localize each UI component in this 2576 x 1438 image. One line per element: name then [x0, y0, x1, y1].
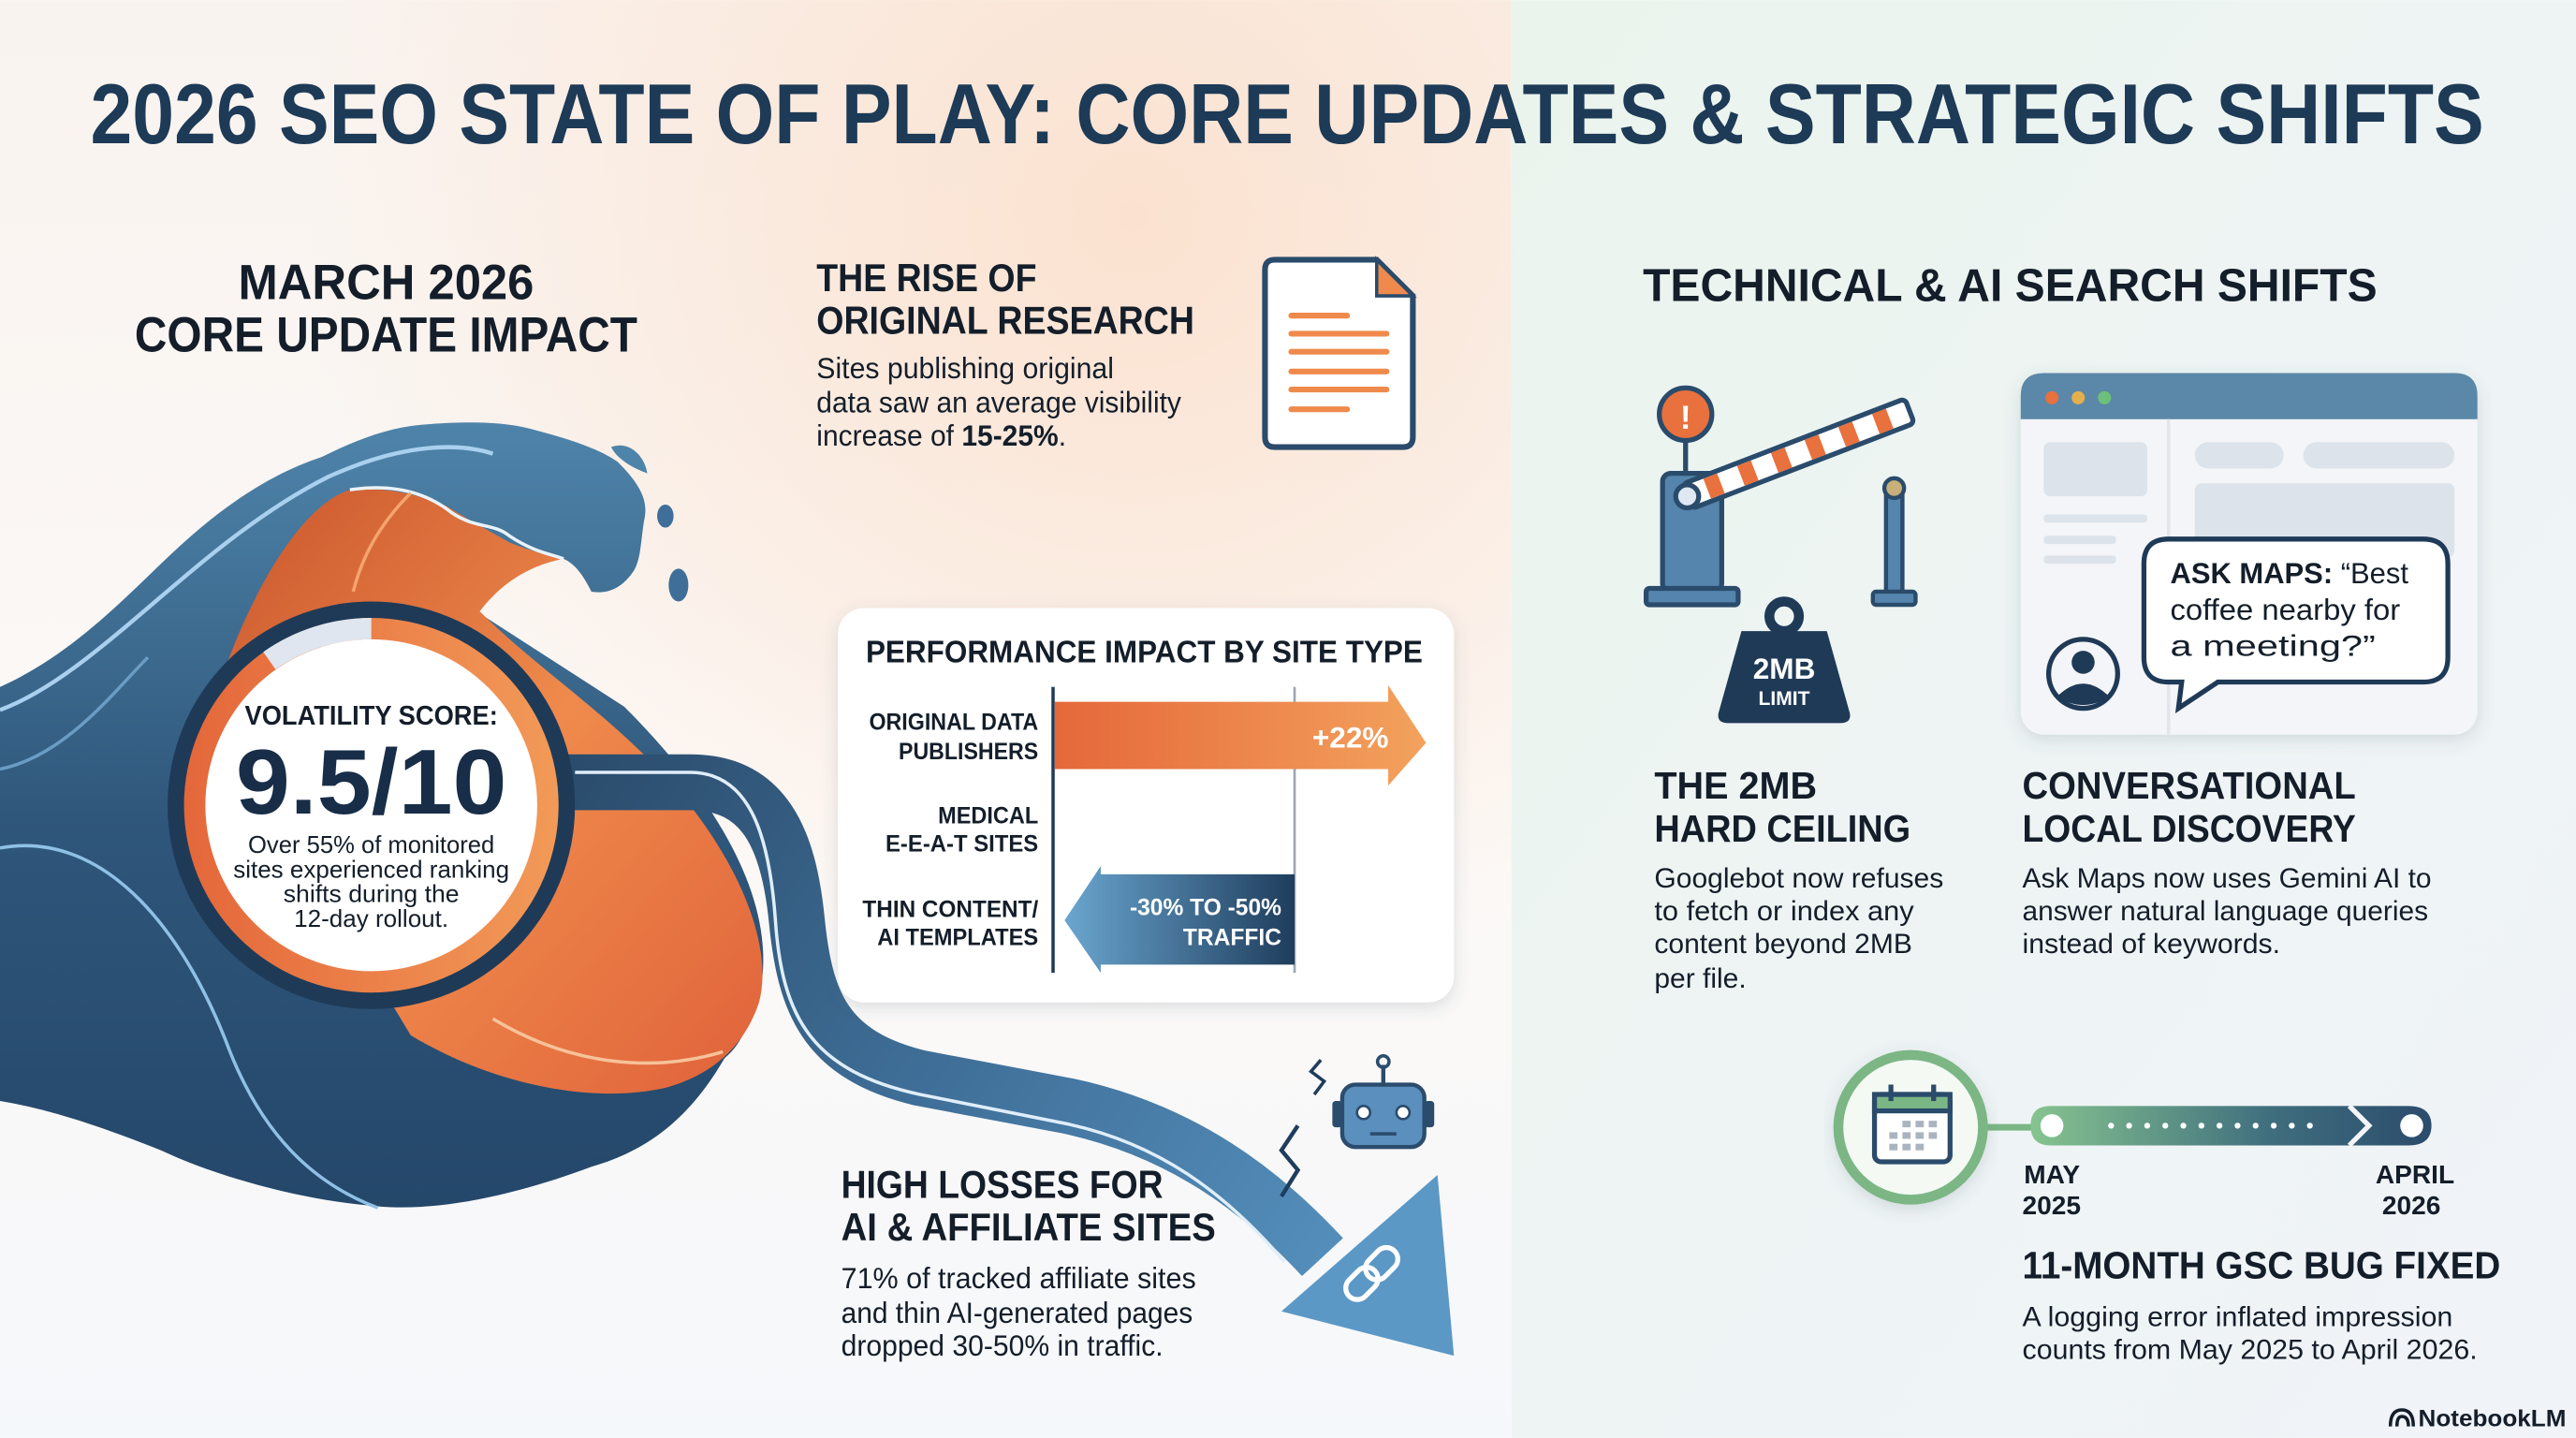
- stream arrow: [559, 772, 1454, 1356]
- text block: 11-month gsc bug fixed: 11-MONTH GSC BUG FIXED: [2023, 1244, 2500, 1287]
- panel: performance impact by site type: THIN CONTENT/: [862, 897, 1038, 922]
- text block: 2MB hard ceiling: content beyond 2MB: [1654, 929, 1912, 960]
- timeline: GSC bug: APRIL: [2376, 1160, 2454, 1189]
- timeline: GSC bug: 2026: [2382, 1191, 2440, 1220]
- text block: 11-month gsc bug fixed: counts from May 2025 to April 2026.: [2023, 1335, 2478, 1366]
- text block: conversational local discovery: instead of keywords.: [2023, 929, 2280, 960]
- text block: high losses: 71% of tracked affiliate sites: [842, 1261, 1196, 1295]
- panel: performance impact by site type: PUBLISHERS: [899, 740, 1038, 765]
- circle: volatility score: shifts during the: [284, 882, 460, 908]
- bar: thin content -30% to -50%: -30% TO -50%: [1130, 896, 1281, 921]
- text block: 2MB hard ceiling: per file.: [1654, 963, 1747, 994]
- panel: performance impact by site type: [838, 609, 1454, 1003]
- text block: 2MB hard ceiling: [1654, 764, 1943, 994]
- circle: volatility score: 9.5/10: [236, 730, 506, 833]
- text block: conversational local discovery: Ask Maps now uses Gemini AI to: [2023, 863, 2432, 894]
- icon: browser with ask maps bubble: coffee nearby for: [2170, 593, 2400, 626]
- text block: rise of original research: data saw an average visibility: [816, 386, 1181, 419]
- wave illustration: [0, 422, 763, 1208]
- text block: high losses: and thin AI-generated pages: [842, 1296, 1193, 1329]
- text block: conversational local discovery: answer natural language queries: [2023, 896, 2428, 927]
- icon: browser with ask maps bubble: [2021, 374, 2478, 735]
- logo: NotebookLM: NotebookLM: [2419, 1407, 2566, 1432]
- icon: robot: [1311, 1056, 1434, 1147]
- timeline: GSC bug: [1838, 1055, 2454, 1220]
- icon: browser with ask maps bubble: ASK MAPS: “Best: [2170, 556, 2408, 590]
- text block: conversational local discovery: CONVERSATIONAL: [2023, 764, 2356, 807]
- panel: performance impact by site type: ORIGINAL DATA: [869, 710, 1038, 735]
- icon: barrier with 2MB weight: !: [1680, 400, 1691, 436]
- panel: performance impact by site type: MEDICAL: [938, 803, 1038, 829]
- timeline: GSC bug: 2025: [2023, 1191, 2081, 1220]
- circle: volatility score: [168, 602, 575, 1009]
- text block: 11-month gsc bug fixed: [2023, 1244, 2500, 1366]
- text block: 2MB hard ceiling: Googlebot now refuses: [1654, 863, 1943, 894]
- text block: rise of original research: Sites publishing original: [816, 351, 1114, 385]
- text block: conversational local discovery: LOCAL DISCOVERY: [2023, 807, 2356, 850]
- heading: technical & ai search shifts: TECHNICAL & AI SEARCH SHIFTS: [1643, 260, 2378, 311]
- circle: volatility score: 12-day rollout.: [294, 906, 448, 932]
- text block: high losses: AI & AFFILIATE SITES: [842, 1205, 1216, 1249]
- text block: conversational local discovery: [2023, 764, 2432, 960]
- circle: volatility score: sites experienced ranking: [233, 857, 509, 883]
- text block: rise of original research: increase of 15-25%.: [816, 418, 1066, 452]
- icon: broken link: [1341, 1242, 1402, 1304]
- bar: thin content -30% to -50%: TRAFFIC: [1183, 925, 1281, 950]
- timeline: GSC bug: MAY: [2024, 1160, 2080, 1189]
- bar: original data +22%: [1055, 685, 1426, 785]
- text block: high losses: [842, 1163, 1216, 1362]
- icon: barrier with 2MB weight: [1647, 388, 1915, 723]
- panel: performance impact by site type: PERFORMANCE IMPACT BY SITE TYPE: [866, 635, 1423, 669]
- text block: 2MB hard ceiling: to fetch or index any: [1654, 896, 1914, 927]
- icon: calendar: [1875, 1085, 1950, 1162]
- circle: volatility score: VOLATILITY SCORE:: [245, 701, 498, 731]
- icon: barrier with 2MB weight: LIMIT: [1759, 688, 1810, 710]
- heading: march 2026 core update impact: CORE UPDATE IMPACT: [135, 308, 637, 363]
- bar: original data +22%: +22%: [1312, 721, 1389, 755]
- heading: march 2026 core update impact: [135, 256, 637, 363]
- text block: high losses: HIGH LOSSES FOR: [842, 1163, 1164, 1207]
- panel: performance impact by site type: E-E-A-T SITES: [886, 831, 1038, 857]
- icon: document: [1265, 259, 1412, 448]
- text block: 2MB hard ceiling: HARD CEILING: [1654, 807, 1910, 850]
- heading: march 2026 core update impact: MARCH 2026: [238, 256, 534, 311]
- circle: volatility score: Over 55% of monitored: [248, 832, 494, 858]
- panel: performance impact by site type: AI TEMPLATES: [877, 925, 1038, 950]
- icon: barrier with 2MB weight: 2MB: [1753, 652, 1815, 685]
- text block: rise of original research: THE RISE OF: [816, 256, 1036, 300]
- text block: rise of original research: [816, 256, 1194, 452]
- text block: high losses: dropped 30-50% in traffic.: [842, 1328, 1164, 1362]
- icon: browser with ask maps bubble: a meeting?”: [2170, 628, 2376, 662]
- drips: [611, 446, 648, 474]
- text block: 11-month gsc bug fixed: A logging error inflated impression: [2023, 1302, 2452, 1333]
- text block: 2MB hard ceiling: THE 2MB: [1654, 764, 1817, 807]
- bar: thin content -30% to -50%: [1064, 866, 1295, 973]
- text block: rise of original research: ORIGINAL RESEARCH: [816, 298, 1194, 342]
